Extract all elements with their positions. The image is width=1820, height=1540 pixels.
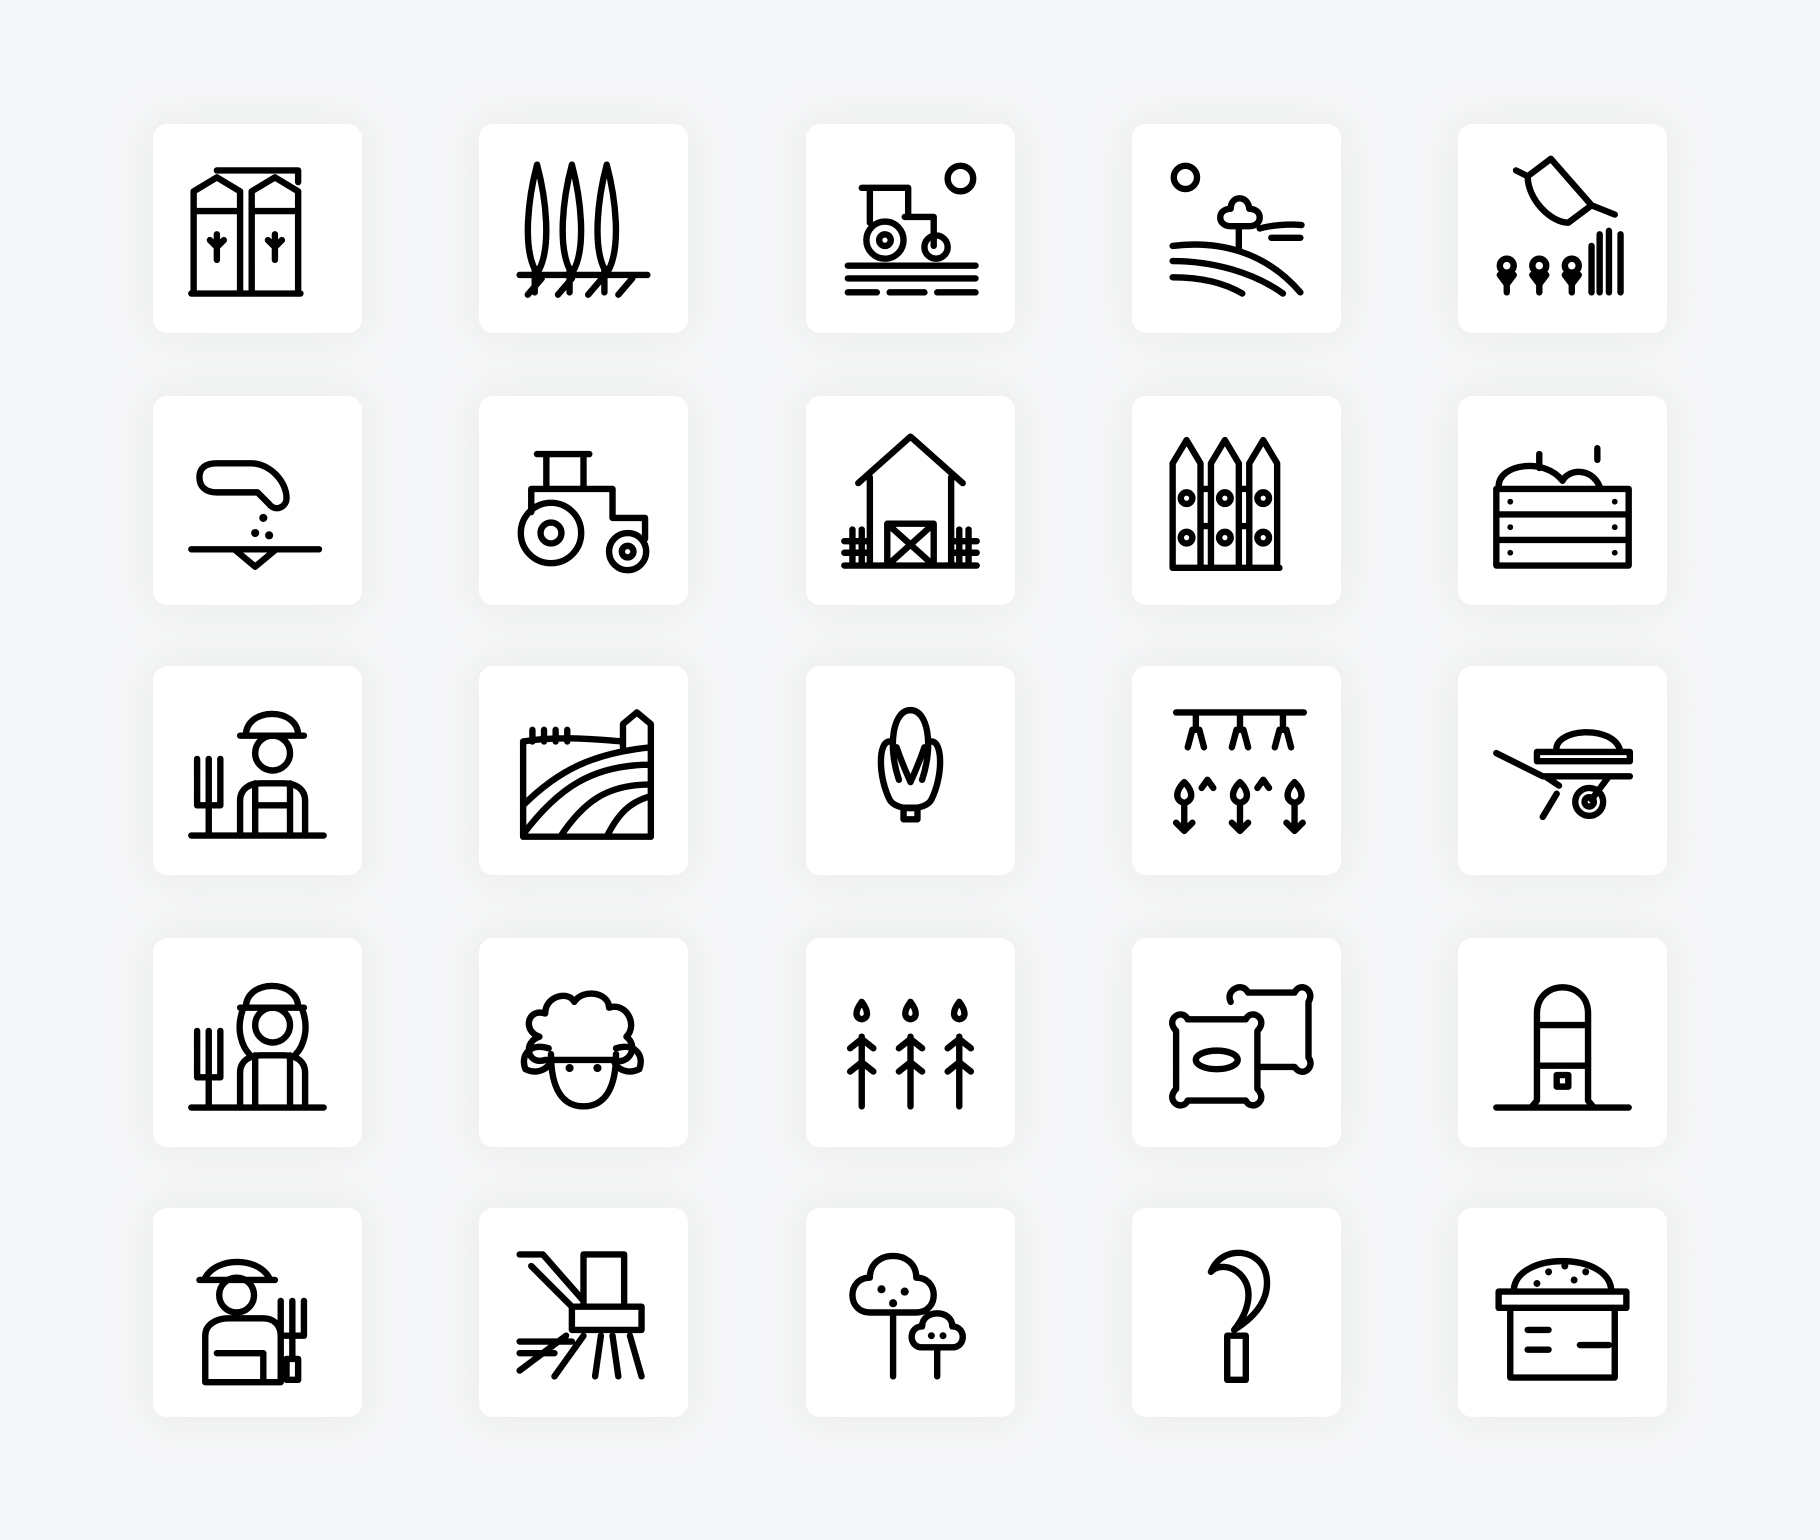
card: tractor xyxy=(479,396,688,605)
card: farmer xyxy=(153,666,362,875)
card: farm field xyxy=(479,666,688,875)
card: wheelbarrow xyxy=(1458,666,1667,875)
card: silos xyxy=(153,124,362,333)
card: grain silo xyxy=(1458,938,1667,1147)
card: corn xyxy=(806,666,1015,875)
card: wheat xyxy=(806,938,1015,1147)
card: barn xyxy=(806,396,1015,605)
card: farmer woman xyxy=(153,938,362,1147)
card: crate xyxy=(1458,396,1667,605)
card: watering can xyxy=(1458,124,1667,333)
card: landscape xyxy=(1132,124,1341,333)
card: fence xyxy=(1132,396,1341,605)
card: sprinkler xyxy=(1132,666,1341,875)
card: farmer with pitchfork xyxy=(153,1208,362,1417)
card: sheep xyxy=(479,938,688,1147)
card: sacks xyxy=(1132,938,1341,1147)
card: sickle xyxy=(1132,1208,1341,1417)
card: tractor field xyxy=(806,124,1015,333)
card: harvester xyxy=(479,1208,688,1417)
card: sowing hand xyxy=(153,396,362,605)
card: grain box xyxy=(1458,1208,1667,1417)
card: fruit trees xyxy=(806,1208,1015,1417)
card: trees xyxy=(479,124,688,333)
